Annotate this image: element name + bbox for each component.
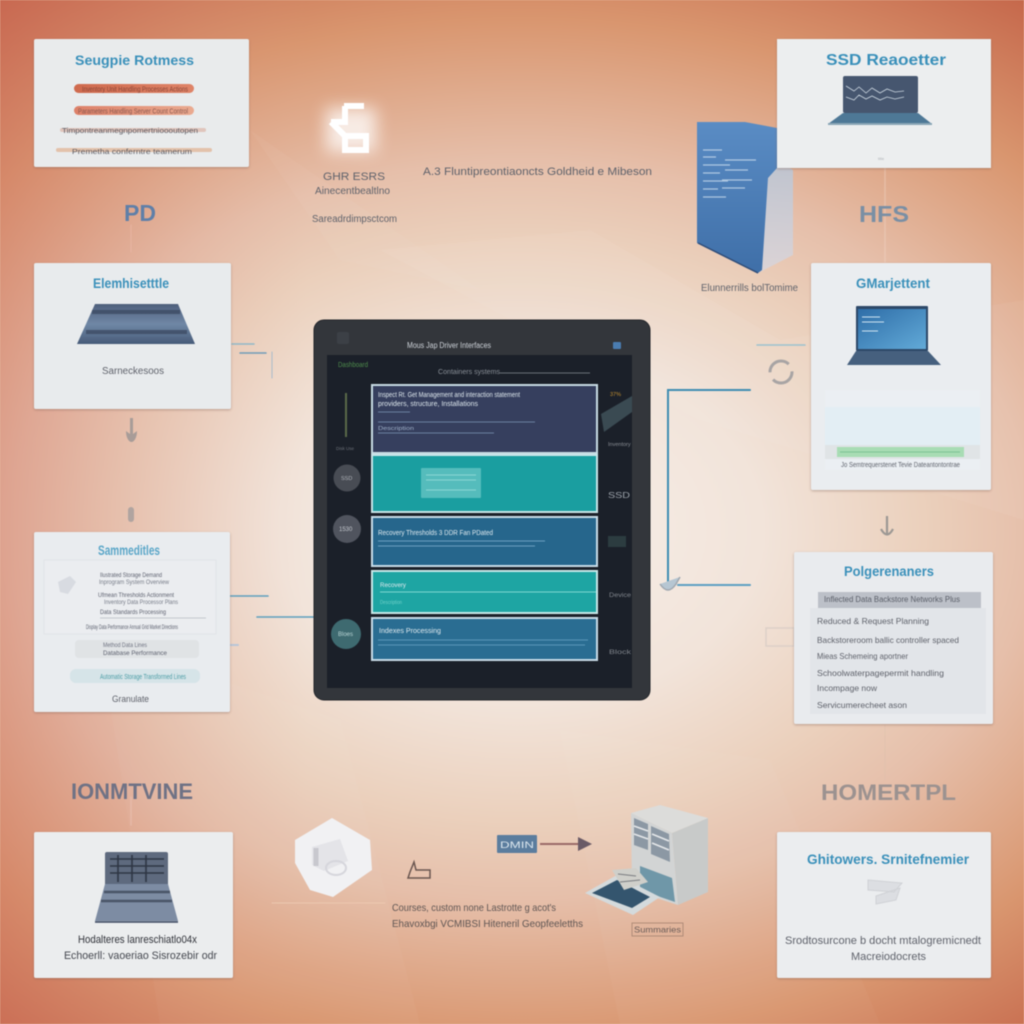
panel: teal chart [372,455,597,512]
server caption [632,923,683,936]
label: hfs: HFS [859,201,909,227]
inner panel: Display Data Performance Annual Grid Market Directions [86,624,178,631]
right column metrics [601,392,632,656]
inner panel: Ilustrated Storage Demand [100,572,162,579]
description line two: Premetha conferntre teamerum [72,147,192,156]
pale chart panel [825,390,980,470]
icon: small bracket pin [660,577,680,590]
grey summary strip: Database Performance [103,650,167,657]
screen header: Dashboard [338,362,368,369]
header text block: Sareadrdimpsctcom [312,214,397,225]
pale chart panel: Jo Semtrequerstenet Tevie Dateantontontrae [841,460,960,469]
header sentence: A.3 Fluntipreontiaoncts Goldheid e Mibeson [423,166,652,178]
panel: teal process: Description [380,600,402,606]
inner panel: Inprogram System Overview [99,579,169,586]
circle badge three: Bloes [338,632,353,638]
right column metrics: Inventory [608,442,631,448]
header text block [312,171,397,225]
description line two [56,147,212,156]
parameter list: Mieas Schemeing aportner [817,651,908,661]
grey summary strip [75,640,199,658]
text line one: Hodalteres lanreschiatlo04x [78,934,197,946]
bottom text block [392,902,583,930]
card title: Seugpie Rotmess [75,52,194,68]
label: homer tpl: HOMERTPL [821,780,956,805]
label: PD: PD [124,200,156,226]
text line one: Srodtosurcone b docht mtalogremicnedt [785,935,981,947]
panel: teal process [372,571,597,613]
faint caption: title [878,156,885,161]
device screen [327,355,632,688]
icon: blue server box [697,122,793,273]
icon: white hexagon module [295,818,372,897]
icon: grey anchor one [126,418,137,442]
circle badge two: 1530 [339,527,353,533]
card title: Sammeditles [98,543,160,558]
parameter list: Reduced & Request Planning [817,616,929,626]
card: storage details [34,532,230,712]
bottom text block: Courses, custom none Lastrotte g acot's [392,902,556,914]
card: chart sheet [811,263,991,490]
right column metrics: Block [609,649,632,656]
tag with arrow [497,835,592,853]
icon: laptop [847,306,941,365]
panel: blue process [372,618,597,660]
panel: blue summary [372,517,597,566]
circle badge two [333,515,361,543]
circle badge one [334,464,360,492]
orange bar one: Inventory Unit Handling Processes Actions [82,84,188,94]
inner panel: Data Standards Processing [100,609,166,616]
header text block: GHR ESRS [323,171,385,183]
text line two: Macreiodocrets [851,951,926,963]
parameter list [810,608,986,714]
panel: blue summary: Recovery Thresholds 3 DDR Fan PDated [378,530,493,537]
teal summary strip [70,669,200,683]
inner panel: Ufmean Thresholds Actionment [98,592,174,599]
card title: SSD Reaoetter [826,52,946,69]
label: ionmtvine: IONMTVINE [71,779,193,804]
parameter list: Incompage now [817,683,878,693]
caption: Sarneckesoos [102,366,164,377]
icon: glowing s-mark [326,106,376,152]
icon: laptop [95,852,178,922]
icon: grey ring [770,361,792,383]
card: software statements [777,832,991,978]
bottom text block: Ehavoxbgi VCMIBSI Hiteneril Geopfeeletths [392,918,583,930]
icon: laptop [828,76,932,125]
card: ssd register [777,39,991,168]
card: parameters [794,552,993,724]
icon: server with tray [585,805,708,915]
card title: Polgerenaners [844,564,934,579]
panel: dark metrics [372,385,597,453]
highlight row: Inflected Data Backstore Networks Plus [824,595,960,604]
circle badge one: SSD [341,476,352,482]
right column metrics: SSD [608,491,630,500]
card: elementstile [34,263,231,409]
caption: Granulate [112,694,149,704]
icon: grey clip [128,507,134,522]
server caption: Elunnerrills bolTomime [701,283,798,294]
sidebar gauge [336,393,354,451]
icon: ssd slab [77,304,195,344]
card title: GMarjettent [856,276,930,291]
parameter list: Backstoreroom ballic controller spaced [817,635,959,645]
orange bar two: Parameters Handling Server Count Control [78,106,188,116]
teal summary strip: Automatic Storage Transformed Lines [100,674,186,681]
panel: dark metrics: Inspect Rt. Get Management and interaction statement [378,392,520,399]
description line one: Timpontreanmegnpomertnioooutopen [62,126,198,135]
header text block: Ainecentbealtlno [315,186,390,197]
circle badge three [331,619,361,649]
panel: dark metrics: Description [378,426,414,432]
sidebar gauge: Disk Use [336,446,354,451]
card: storage runtimes [34,39,249,167]
panel: dark metrics: providers, structure, Installations [378,401,478,408]
device top bar: Mous Jap Driver Interfaces [407,341,491,350]
icon: down arrow [881,516,893,535]
icon: small sketch [408,862,430,878]
panel: blue process: Indexes Processing [379,628,441,635]
tag with arrow: DMIN [500,840,534,850]
highlight row [818,592,981,608]
right column metrics: Device [609,592,631,599]
text line two: Echoerll: vaoeriao Sisrozebir odr [64,950,217,962]
parameter list: Servicumerecheet ason [817,700,907,710]
server caption: Summaries [634,926,681,934]
card: laptop summary [34,832,233,978]
connector lines [131,168,885,903]
card title: Ghitowers. Srnitefnemier [807,851,970,867]
card title: Elemhisetttle [93,275,169,291]
inner panel [44,560,216,634]
inner panel: Inventory Data Processor Plans [104,599,179,606]
central device [314,320,650,700]
right column metrics: 37% [610,392,621,398]
device top bar [337,332,621,350]
parameter list: Schoolwaterpagepermit handling [817,668,944,678]
panel: teal process: Recovery [380,582,407,589]
grey summary strip: Method Data Lines [103,643,147,649]
icon: cable [868,880,902,904]
screen header [338,362,590,376]
screen header: Containers systems [438,369,501,376]
